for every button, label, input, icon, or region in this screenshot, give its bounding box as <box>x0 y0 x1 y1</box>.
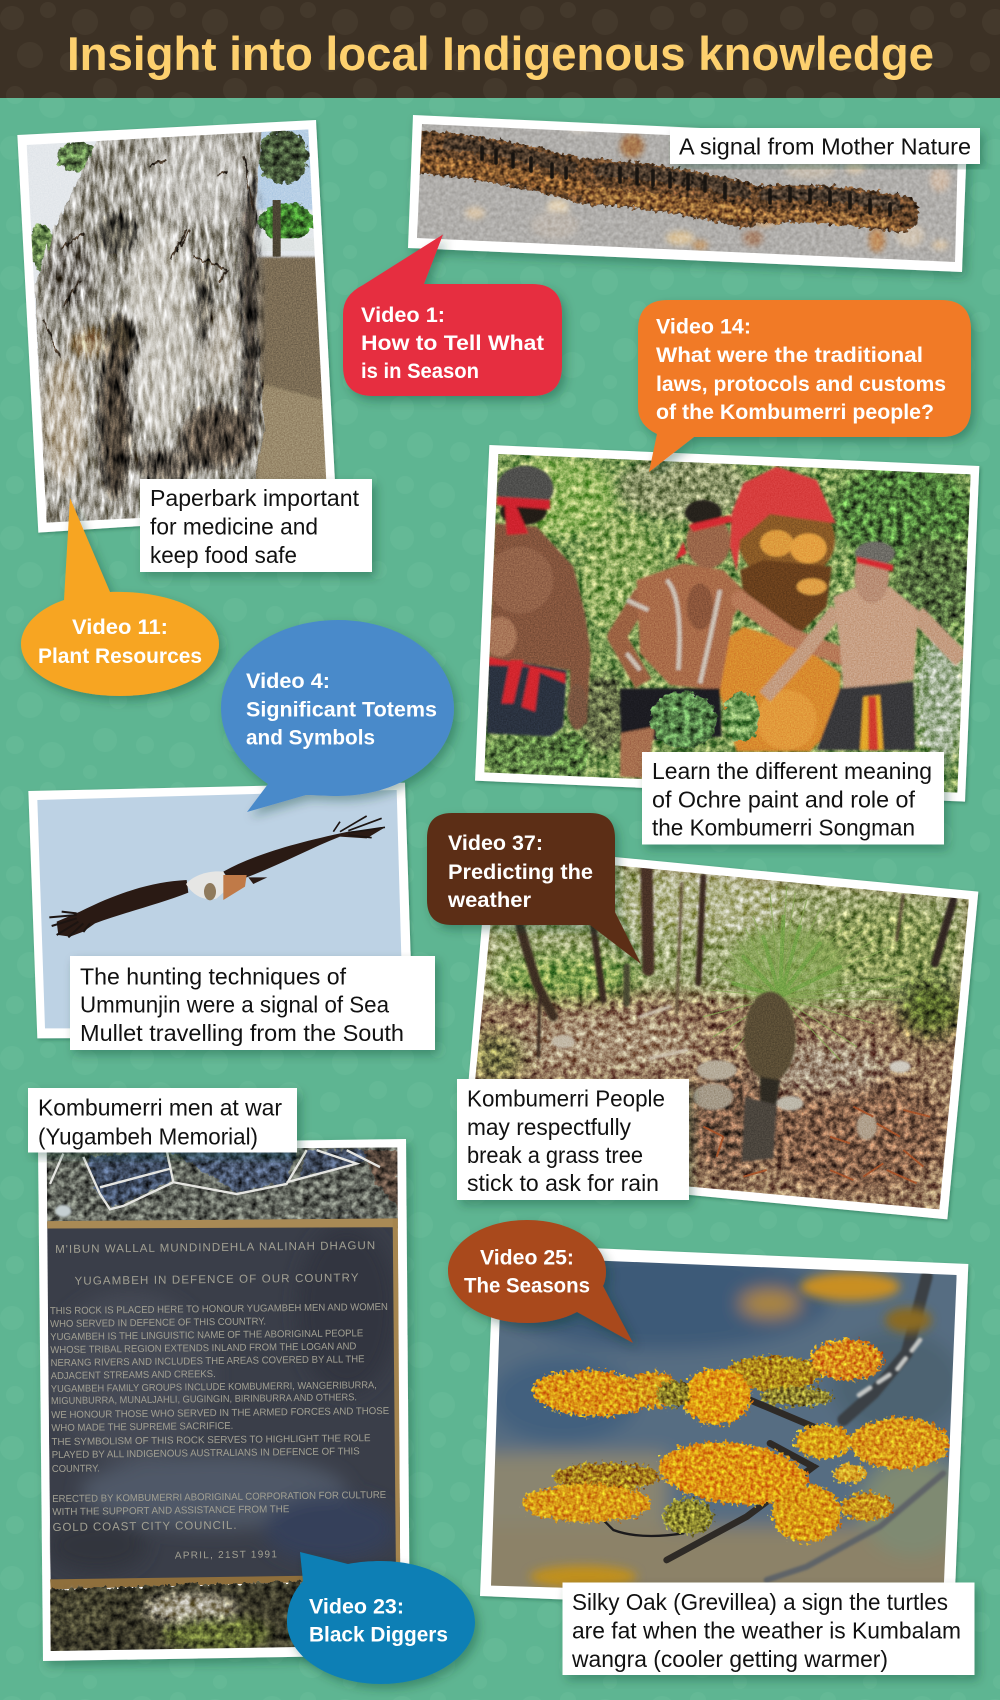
right man <box>765 610 837 697</box>
speech bubble: Video 25: The Seasons <box>464 1274 590 1298</box>
speech bubble: Video 23 <box>287 1552 475 1684</box>
plaque text: PLAYED BY ALL INDIGENOUS AUSTRALIANS IN DEFENCE OF THIS <box>52 1446 360 1461</box>
caption: paperbark: keep food safe <box>150 542 297 568</box>
plaque text: NERANG RIVERS AND INCLUDES THE AREAS COVERED BY ALL THE <box>50 1354 365 1369</box>
middle man <box>617 593 643 683</box>
statue <box>720 627 841 752</box>
plaque text: COUNTRY. <box>52 1463 100 1475</box>
header band <box>0 0 1000 98</box>
speech bubble: Video 4 <box>221 620 454 812</box>
photo: ceremony men with carved statue <box>470 440 990 810</box>
plaque text: YUGAMBEH IS THE LINGUISTIC NAME OF THE ABORIGINAL PEOPLE <box>50 1328 364 1343</box>
photo: Yugambeh memorial plaque <box>37 1139 410 1667</box>
plaque text: YUGAMBEH IN DEFENCE OF OUR COUNTRY <box>74 1272 359 1288</box>
caption: a signal from Mother Nature <box>670 128 980 164</box>
caption: silky oak: are fat when the weather is Kumbalam <box>572 1618 961 1644</box>
caption: silky oak <box>562 1582 974 1675</box>
plaque text: GOLD COAST CITY COUNCIL. <box>52 1520 237 1534</box>
plaque text: ERECTED BY KOMBUMERRI ABORIGINAL CORPORATION FOR CULTURE <box>52 1490 387 1505</box>
plaque text: WITH THE SUPPORT AND ASSISTANCE FROM THE <box>52 1504 290 1518</box>
plaque text: WHO MADE THE SUPREME SACRIFICE. <box>51 1421 233 1434</box>
caption: paperbark: Paperbark important <box>150 485 360 511</box>
photo: paperbark tree <box>17 120 337 533</box>
caption: ochre paint: Learn the different meaning <box>652 758 932 784</box>
plaque text: WHO SERVED IN DEFENCE OF THIS COUNTRY. <box>50 1316 266 1330</box>
plaque text: YUGAMBEH FAMILY GROUPS INCLUDE KOMBUMERRI, WANGERIBURRA, <box>51 1380 377 1395</box>
caption: Kombumerri men at war: Kombumerri men at war <box>38 1094 282 1120</box>
speech bubble: Video 37: weather <box>447 889 531 912</box>
caption: Kombumerri men at war <box>28 1088 297 1152</box>
caption: grass tree: break a grass tree <box>467 1142 643 1168</box>
speech bubble: Video 23: Black Diggers <box>309 1624 448 1646</box>
speech bubble: Video 14: What were the traditional <box>656 344 923 367</box>
caption: ochre paint <box>642 752 944 844</box>
speech bubble: Video 37: Video 37: <box>448 832 543 855</box>
speech bubble: Video 25: Video 25: <box>480 1246 574 1270</box>
speech bubble: Video 4: Video 4: <box>246 670 330 693</box>
speech bubble: Video 4: Significant Totems <box>246 698 437 722</box>
photo: caterpillar <box>408 115 970 272</box>
speech bubble: Video 25 <box>448 1220 633 1343</box>
plaque text: WHOSE TRIBAL REGION EXTENDS INLAND FROM THE LOGAN AND <box>50 1341 356 1356</box>
plaque text <box>49 1240 391 1563</box>
caption: paperbark <box>140 479 372 572</box>
caption: ochre paint: the Kombumerri Songman <box>652 814 915 840</box>
caption: a signal from Mother Nature: A signal from Mother Nature <box>679 134 971 160</box>
caption: ochre paint: of Ochre paint and role of <box>652 786 916 812</box>
speech bubble: Video 11: Video 11: <box>72 616 168 639</box>
speech bubble: Video 23: Video 23: <box>309 1596 404 1618</box>
speech bubble: Video 11: Plant Resources <box>38 645 202 668</box>
speech bubble: Video 37 <box>427 813 641 964</box>
caption: grass tree: may respectfully <box>467 1114 631 1140</box>
grass tree <box>703 887 907 1060</box>
caption: silky oak: wangra (cooler getting warmer) <box>571 1646 888 1672</box>
caption: hunting techniques: The hunting techniques of <box>80 964 347 990</box>
plaque text: THE SYMBOLISM OF THIS ROCK SERVES TO HIGHLIGHT THE ROLE <box>51 1433 371 1448</box>
left man <box>489 523 591 723</box>
speech bubble: Video 14 <box>638 300 971 472</box>
speech bubble: Video 37: Predicting the <box>448 861 593 884</box>
bird <box>49 816 385 937</box>
plaque text: WE HONOUR THOSE WHO SERVED IN THE ARMED FORCES AND THOSE <box>51 1406 390 1421</box>
caption: hunting techniques <box>70 956 435 1050</box>
photo: sea eagle in sky <box>28 783 413 1038</box>
speech bubble: Video 4: and Symbols <box>246 726 375 750</box>
plaque text: ADJACENT STREAMS AND CREEKS. <box>51 1369 216 1382</box>
caption: grass tree: Kombumerri People <box>467 1086 665 1112</box>
caption: silky oak: Silky Oak (Grevillea) a sign the turtles <box>572 1589 948 1615</box>
speech bubble: Video 14: laws, protocols and customs <box>656 373 946 396</box>
caption: paperbark: for medicine and <box>150 514 318 540</box>
caption: Kombumerri men at war: (Yugambeh Memorial) <box>38 1124 258 1150</box>
caption: hunting techniques: Ummunjin were a signal of Sea <box>80 992 389 1018</box>
caption: hunting techniques: Mullet travelling from the South <box>80 1020 404 1046</box>
speech bubble: Video 14: of the Kombumerri people? <box>656 401 934 424</box>
speech bubble: Video 1: is in Season <box>361 360 479 383</box>
caption: grass tree <box>457 1079 689 1200</box>
photo: silky oak flowers <box>460 1233 993 1620</box>
speech bubble: Video 11 <box>21 498 219 696</box>
plaque text: MIGUNBURRA, MUNALJAHLI, GUGINGIN, BIRINBURRA AND OTHERS. <box>51 1392 357 1407</box>
leaves <box>550 692 760 775</box>
speech bubble: Video 1: Video 1: <box>361 304 445 327</box>
plaque text: THIS ROCK IS PLACED HERE TO HONOUR YUGAMBEH MEN AND WOMEN <box>50 1302 388 1317</box>
plaque text: M'IBUN WALLAL MUNDINDEHLA NALINAH DHAGUN <box>55 1240 375 1256</box>
speech bubble: Video 1: How to Tell What <box>361 332 544 355</box>
speech bubble: Video 1 <box>343 234 562 396</box>
plaque text: APRIL, 21ST 1991 <box>175 1549 277 1562</box>
title: Insight into local Indigenous knowledge <box>67 27 934 80</box>
speech bubble: Video 14: Video 14: <box>656 316 751 338</box>
caption: grass tree: stick to ask for rain <box>467 1170 659 1196</box>
photo: grass tree in forest <box>468 857 981 1222</box>
